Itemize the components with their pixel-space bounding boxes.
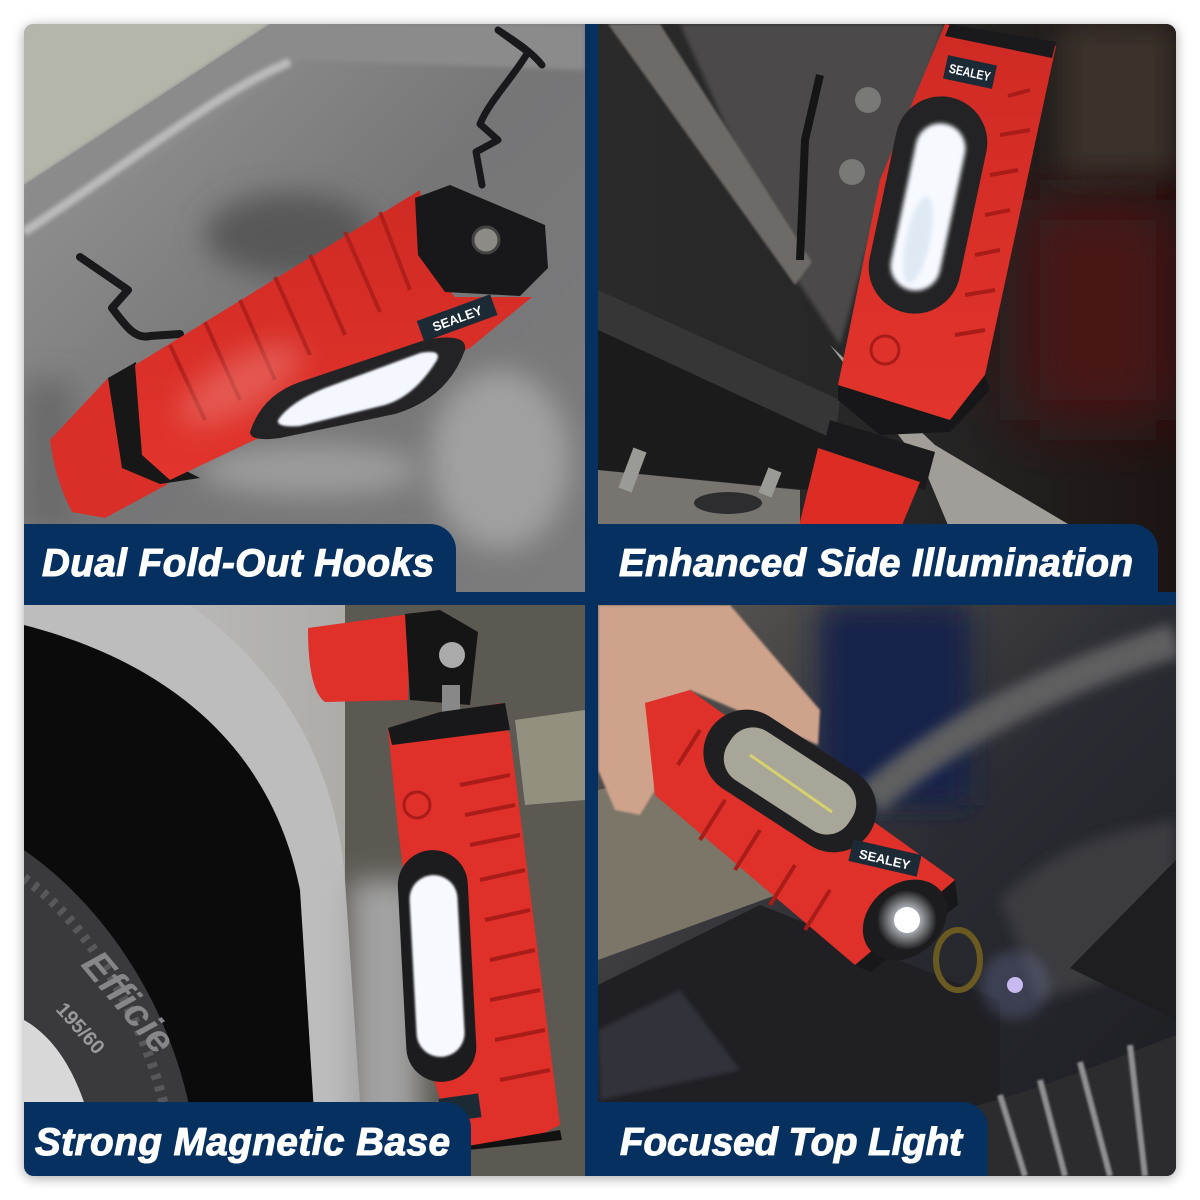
icon: rubber gaiter	[960, 1035, 1176, 1176]
work light	[50, 185, 548, 518]
work light	[308, 610, 562, 1152]
work light	[798, 24, 1056, 530]
label: strong magnetic base	[24, 1102, 471, 1176]
logo badge	[943, 55, 997, 89]
logo badge: SEALEY	[430, 302, 485, 334]
work light: SEALEY	[858, 846, 912, 873]
panel: strong magnetic base photo	[24, 605, 585, 1176]
label: focused top light: Focused Top Light	[620, 1121, 964, 1164]
panel: enhanced side illumination photo	[598, 24, 1176, 592]
logo badge: SEALEY	[948, 61, 992, 84]
label: dual fold-out hooks	[24, 524, 456, 592]
tire	[24, 850, 195, 1176]
icon: lower hook	[80, 257, 180, 337]
label: focused top light	[586, 1102, 988, 1176]
panel: focused top light photo	[598, 605, 1176, 1176]
logo badge	[417, 294, 498, 342]
icon: upper hook	[476, 30, 542, 185]
label: enhanced side illumination: Enhanced Side Illumination	[619, 542, 1133, 585]
label: strong magnetic base: Strong Magnetic Base	[35, 1121, 450, 1164]
tire: 195/60	[51, 999, 109, 1059]
hand	[598, 605, 820, 815]
tire: Efficie	[73, 943, 184, 1062]
label: enhanced side illumination	[586, 524, 1158, 592]
label: dual fold-out hooks: Dual Fold-Out Hooks	[42, 542, 434, 585]
work light	[645, 690, 963, 977]
panel: dual fold-out hooks photo	[24, 24, 585, 592]
